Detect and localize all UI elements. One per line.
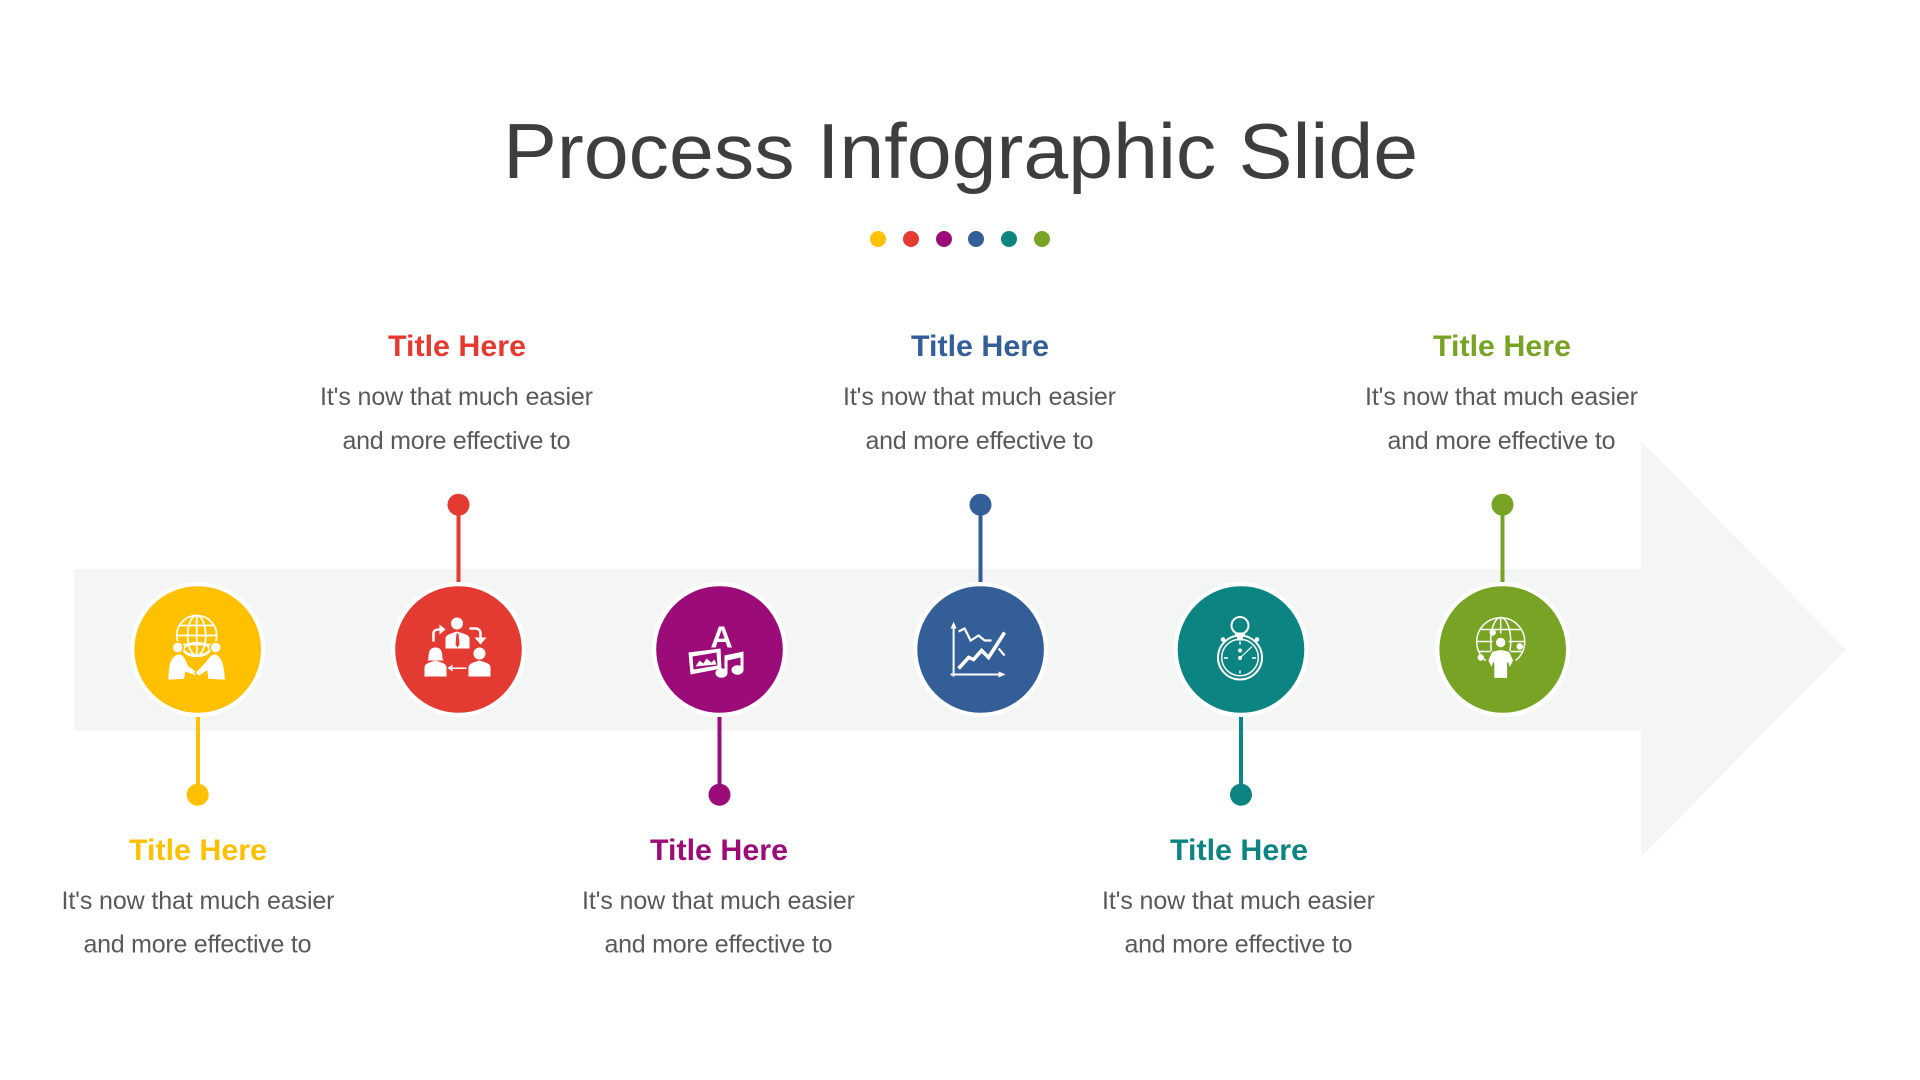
label 4: It's now that much easier	[843, 383, 1116, 411]
label 6	[1365, 330, 1638, 455]
connector 5	[1230, 716, 1252, 806]
connector 4	[970, 494, 992, 582]
node 6	[1435, 582, 1570, 717]
label 3: It's now that much easier	[582, 887, 855, 915]
icon: people cycle	[424, 618, 490, 676]
icon: letter, picture and music	[688, 620, 744, 678]
step 3: purple	[582, 582, 855, 958]
label 6: and more effective to	[1388, 427, 1616, 455]
connector 2	[448, 494, 470, 582]
label 2: It's now that much easier	[320, 383, 593, 411]
label 3: and more effective to	[604, 930, 832, 958]
label 1: Title Here	[129, 834, 267, 867]
node 4	[913, 582, 1048, 717]
label 6: It's now that much easier	[1365, 383, 1638, 411]
label 2	[320, 330, 593, 455]
background timeline arrow	[74, 441, 1846, 857]
node 3	[652, 582, 787, 717]
label 2: Title Here	[388, 330, 526, 363]
label 1: and more effective to	[84, 930, 312, 958]
step 5: teal	[1102, 582, 1375, 958]
label 4	[843, 330, 1116, 455]
icon: globe and handshake	[168, 616, 226, 680]
icon: letter, picture and music: A	[710, 620, 733, 654]
step 2: red	[320, 330, 593, 717]
connector 1	[187, 716, 209, 806]
label 5	[1102, 834, 1375, 958]
label 1	[62, 834, 334, 958]
label 2: and more effective to	[342, 427, 570, 455]
step 4: blue	[843, 330, 1116, 717]
icon: globe and businessperson	[1477, 618, 1525, 678]
connector 3	[708, 716, 730, 806]
label 3	[582, 834, 855, 958]
label 3: Title Here	[650, 834, 788, 867]
node 2	[391, 582, 526, 717]
label 5: and more effective to	[1124, 930, 1352, 958]
label 1: It's now that much easier	[62, 887, 334, 915]
node 1	[130, 582, 265, 717]
connector 6	[1492, 494, 1514, 582]
colour dots row	[870, 231, 1050, 247]
node 5	[1174, 582, 1308, 717]
label 4: Title Here	[911, 330, 1049, 363]
label 5: It's now that much easier	[1102, 887, 1375, 915]
step 1: yellow	[62, 582, 334, 958]
icon: line chart	[951, 622, 1006, 678]
label 6: Title Here	[1433, 330, 1571, 363]
step 6: green	[1365, 330, 1638, 717]
label 5: Title Here	[1170, 834, 1308, 867]
title: Process Infographic Slide	[503, 107, 1418, 195]
icon: stopwatch	[1218, 617, 1262, 680]
label 4: and more effective to	[866, 427, 1094, 455]
